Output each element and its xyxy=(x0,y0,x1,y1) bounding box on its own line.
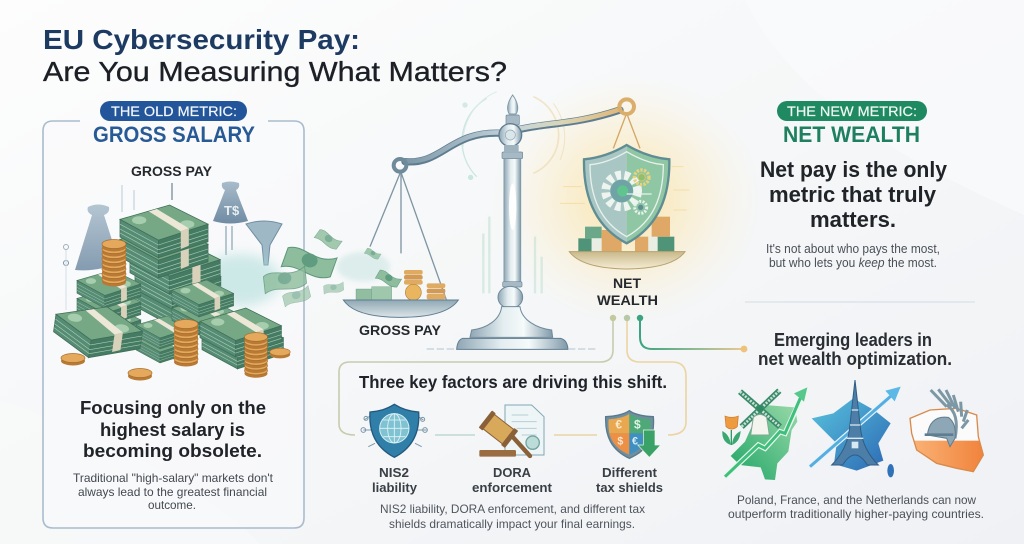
note: keep the most: It's not about who pays the most, xyxy=(766,242,940,256)
label: different tax shields xyxy=(596,465,663,495)
decorative rings xyxy=(462,92,565,293)
badge: the new metric xyxy=(777,101,927,121)
icon: net wealth shield xyxy=(580,143,673,247)
title: Are You Measuring What Matters? xyxy=(43,56,507,87)
icon: tax shield: $ xyxy=(617,436,623,448)
statement: obsolete: highest salary is xyxy=(100,419,245,440)
statement: net pay matters: Net pay is the only xyxy=(760,157,948,182)
map: France xyxy=(810,380,901,477)
badge: the new metric: THE NEW METRIC: xyxy=(787,103,917,119)
illustration: balance scale xyxy=(337,92,689,349)
map: Poland xyxy=(907,389,987,474)
note: keep the most xyxy=(766,242,940,270)
statement: obsolete: becoming obsolete. xyxy=(83,440,262,461)
heading: emerging leaders: net wealth optimization. xyxy=(758,348,952,369)
panel: three key factors xyxy=(359,372,667,531)
note: countries xyxy=(728,493,984,521)
left pan contents xyxy=(337,247,445,300)
left strings xyxy=(370,173,447,301)
note: factors impact: shields dramatically impact your final earnings. xyxy=(389,517,635,531)
title: EU Cybersecurity Pay: xyxy=(43,24,360,55)
icon: tax shield: $ xyxy=(634,418,641,432)
left pan xyxy=(343,300,458,317)
coin stacks xyxy=(61,240,290,380)
spray dust xyxy=(200,254,280,306)
heading: emerging leaders xyxy=(758,329,952,369)
note: traditional markets: always lead to the greatest financial xyxy=(78,485,267,499)
label: gross pay: GROSS PAY xyxy=(131,164,212,179)
note: countries: Poland, France, and the Netherlands can now xyxy=(737,493,976,507)
panel: emerging leaders xyxy=(722,329,987,521)
map: Netherlands xyxy=(722,387,807,480)
icon: tax shield: € xyxy=(615,418,622,432)
circuit traces xyxy=(560,167,689,210)
icon: DORA gavel and document xyxy=(479,405,544,457)
panel: new metric xyxy=(760,101,948,270)
icon: T$ weight: T$ xyxy=(224,203,240,218)
right ring xyxy=(619,99,634,114)
label: different tax shields: Different xyxy=(602,465,658,480)
note: traditional markets: outcome. xyxy=(148,498,196,512)
icon: funnel xyxy=(246,221,282,265)
statement: net pay matters: metric that truly xyxy=(769,182,937,207)
statement: obsolete xyxy=(80,397,266,461)
icon: T$ weight xyxy=(213,182,248,255)
post xyxy=(427,95,597,349)
flying bills xyxy=(261,228,345,308)
note: traditional markets xyxy=(73,471,274,512)
label: DORA enforcement: DORA xyxy=(493,465,532,480)
badge: the old metric: THE OLD METRIC: xyxy=(111,103,237,119)
connector lines xyxy=(339,315,747,435)
badge: the old metric xyxy=(100,101,247,121)
heading: three key factors: Three key factors are driving this shift. xyxy=(359,372,667,392)
icon: tax shield xyxy=(606,411,661,458)
label: NIS2 liability xyxy=(372,465,418,495)
cash stacks xyxy=(51,205,283,369)
label: DORA enforcement xyxy=(472,465,553,495)
label: net wealth on scale: NET xyxy=(613,275,641,291)
heading: emerging leaders: Emerging leaders in xyxy=(774,329,932,350)
icon: tax shield: € xyxy=(632,436,638,448)
heading: net wealth: NET WEALTH xyxy=(783,122,920,147)
left ring xyxy=(394,159,406,172)
statement: net pay matters xyxy=(760,157,948,232)
right pan xyxy=(569,252,685,269)
title xyxy=(43,24,507,87)
panel: old metric xyxy=(43,101,345,528)
label: DORA enforcement: enforcement xyxy=(472,480,553,495)
label: different tax shields: tax shields xyxy=(596,480,663,495)
beam xyxy=(405,109,620,162)
note: factors impact: NIS2 liability, DORA enforcement, and different tax xyxy=(380,502,645,516)
heading: gross salary: GROSS SALARY xyxy=(93,122,255,147)
statement: net pay matters: matters. xyxy=(810,207,896,232)
label: net wealth on scale: WEALTH xyxy=(597,292,658,308)
note: keep the most: but who lets you keep the most. xyxy=(769,256,937,270)
label: NIS2 liability: liability xyxy=(372,480,418,495)
label: net wealth on scale xyxy=(597,275,658,308)
right strings xyxy=(613,115,640,148)
note: countries: outperform traditionally higher-paying countries. xyxy=(728,507,984,521)
statement: obsolete: Focusing only on the xyxy=(80,397,266,418)
icon: left weight xyxy=(75,204,119,270)
note: traditional markets: Traditional "high-salary" markets don't xyxy=(73,471,274,485)
label: gross pay on scale: GROSS PAY xyxy=(359,322,442,338)
illustration: money pile xyxy=(51,182,345,380)
note: factors impact xyxy=(380,502,645,531)
icon: NIS2 shield xyxy=(361,404,427,457)
label: NIS2 liability: NIS2 xyxy=(379,465,409,480)
right pan contents xyxy=(578,217,674,252)
